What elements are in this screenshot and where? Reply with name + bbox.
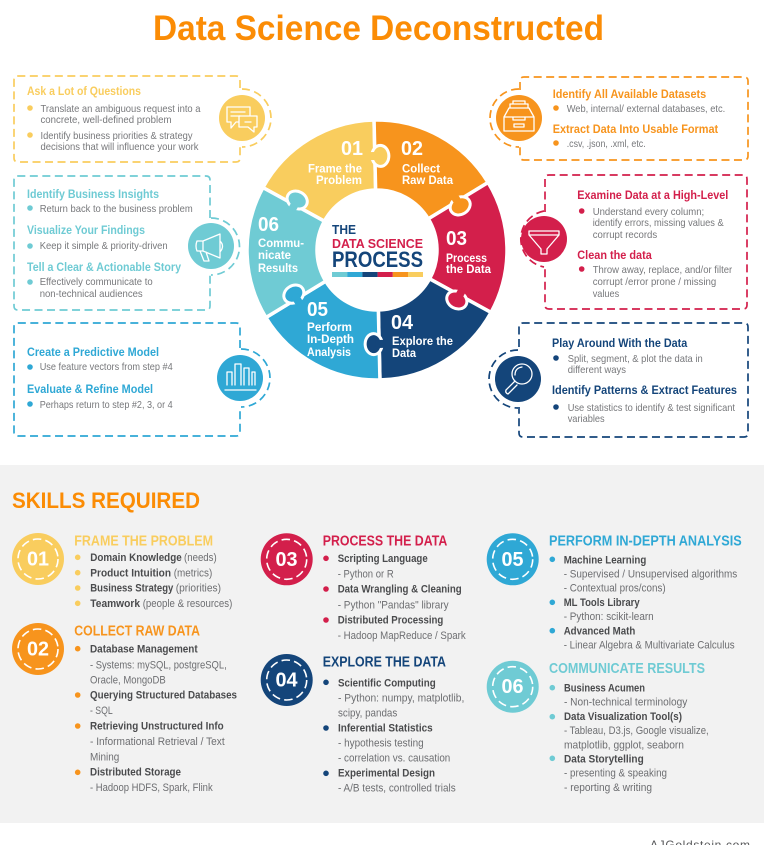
panel: process data details — [521, 175, 747, 309]
title: Data Science Deconstructed — [153, 9, 604, 48]
heading: evaluate: Evaluate & Refine Model — [27, 384, 153, 396]
segment label 05: Analysis — [307, 345, 351, 359]
text: examine — [579, 207, 724, 241]
skill: collect raw data: 02 — [27, 638, 49, 660]
skill: perform in-depth analysis: Machine Learning — [564, 554, 646, 566]
skill: frame the problem: Business Strategy — [90, 583, 173, 595]
skill: perform in-depth analysis: ML Tools Library — [564, 597, 640, 609]
skill: process the data: Scripting Language — [338, 553, 428, 565]
text: story: Effectively communicate to — [40, 277, 153, 288]
text: clean — [579, 265, 733, 300]
skill: frame the problem: (needs) — [184, 552, 217, 564]
segment label 03: the Data — [446, 262, 491, 276]
heading: ask questions: Ask a Lot of Questions — [27, 86, 141, 98]
center logo: PROCESS — [332, 247, 423, 272]
text: insights: Return back to the business problem — [40, 204, 193, 215]
skill: explore the data — [261, 654, 464, 795]
skill: collect raw data: Retrieving Unstructured Info — [90, 720, 224, 732]
text: predictive model: Use feature vectors from step #4 — [40, 362, 173, 373]
panel: explore data details — [489, 323, 748, 437]
skill: communicate results: - presenting & speaking — [564, 768, 667, 780]
skill: collect raw data: Database Management — [90, 643, 198, 655]
skill: frame the problem: (people & resources) — [143, 598, 232, 610]
heading: play: Play Around With the Data — [552, 338, 688, 350]
heading: skills required: SKILLS REQUIRED — [12, 488, 200, 513]
heading: predictive model: Create a Predictive Model — [27, 347, 159, 359]
text: examine: corrupt records — [593, 230, 657, 241]
skill: frame the problem: (metrics) — [174, 567, 212, 579]
text: play: Split, segment, & plot the data in — [568, 354, 703, 365]
skill: perform in-depth analysis: Advanced Math — [564, 625, 635, 637]
skill: communicate results: Business Acumen — [564, 682, 645, 694]
skill: perform in-depth analysis: 05 — [502, 549, 524, 571]
bullet list: ask questions: Translate an ambiguous request into a — [40, 104, 201, 115]
skill: frame the problem: Product Intuition — [90, 567, 171, 579]
text: extract: .csv, .json, .xml, etc. — [567, 139, 646, 150]
segment label 02: Raw Data — [402, 173, 453, 187]
skill: perform in-depth analysis — [487, 533, 742, 651]
skill: frame the problem: Domain Knowledge — [90, 552, 182, 564]
skill: collect raw data: - Hadoop HDFS, Spark, Flink — [90, 782, 213, 794]
heading: datasets: Identify All Available Datasets — [553, 89, 706, 101]
center logo: DATA SCIENCE — [332, 236, 423, 251]
bullet list: ask questions — [27, 104, 201, 153]
segment label 03: 03 — [446, 228, 467, 250]
segment label 04: Data — [392, 346, 416, 360]
skill: communicate results: - Non-technical terminology — [564, 697, 688, 709]
panel: skills required — [0, 465, 764, 823]
heading: examine: Examine Data at a High-Level — [577, 190, 728, 202]
skill: collect raw data: Oracle, MongoDB — [90, 674, 166, 686]
segment label 04 — [391, 312, 453, 360]
heading: insights: Identify Business Insights — [27, 189, 159, 201]
text: patterns — [553, 403, 735, 425]
icon: bar chart — [217, 355, 263, 401]
center logo — [332, 223, 423, 277]
segment label 06 — [258, 214, 304, 275]
bullet list: ask questions: Identify business priorities & strategy — [40, 131, 193, 142]
heading: visualize: Visualize Your Findings — [27, 225, 145, 237]
skill: communicate results: Data Visualization Tool(s) — [564, 711, 682, 723]
skill: frame the problem — [12, 533, 232, 610]
skill: collect raw data: Mining — [90, 752, 119, 764]
segment label 05: In-Depth — [307, 332, 354, 346]
skill: collect raw data — [12, 623, 237, 794]
skill: collect raw data: Querying Structured Databases — [90, 690, 237, 702]
skill: process the data: - Hadoop MapReduce / Spark — [338, 630, 466, 642]
skill: process the data: - Python or R — [338, 568, 394, 580]
text: evaluate: Perhaps return to step #2, 3, or 4 — [40, 400, 173, 411]
skill: communicate results: matplotlib, ggplot, seaborn — [564, 739, 684, 751]
heading: extract: Extract Data Into Usable Format — [553, 124, 718, 136]
text: patterns: Use statistics to identify & test significant — [568, 403, 735, 414]
panel: frame the problem details — [14, 76, 271, 162]
text: play: different ways — [568, 365, 626, 376]
skill: explore the data: - hypothesis testing — [338, 738, 424, 750]
skill: perform in-depth analysis: - Linear Algebra & Multivariate Calculus — [564, 639, 735, 651]
skill: explore the data: - correlation vs. causation — [338, 753, 450, 765]
skill: collect raw data: - SQL — [90, 705, 113, 717]
text: clean: values — [593, 289, 619, 300]
panel: communicate results details — [14, 176, 240, 310]
skill: explore the data: - Python: numpy, matplotlib, — [338, 693, 464, 705]
segment label 06: nicate — [258, 248, 291, 262]
skill: explore the data: scipy, pandas — [338, 708, 397, 720]
text: visualize: Keep it simple & priority-driven — [40, 241, 168, 252]
skill: perform in-depth analysis: - Python: scikit-learn — [564, 611, 654, 623]
skill: communicate results — [487, 661, 709, 794]
skill: process the data — [261, 533, 466, 642]
icon: megaphone — [188, 223, 234, 269]
skill: frame the problem: Teamwork — [90, 598, 140, 610]
segment label 01: Frame the — [308, 162, 362, 176]
bullet list: ask questions: decisions that will influence your work — [40, 142, 199, 153]
segment label 06: Commu- — [258, 236, 304, 250]
segment label 05: 05 — [307, 299, 328, 321]
skill: process the data: PROCESS THE DATA — [323, 534, 448, 550]
heading: clean: Clean the data — [577, 250, 652, 262]
segment label 06: Results — [258, 261, 298, 275]
icon: speech bubbles — [219, 95, 265, 141]
skill: perform in-depth analysis: PERFORM IN-DEPTH ANALYSIS — [549, 534, 742, 550]
skill: communicate results: COMMUNICATE RESULTS — [549, 661, 705, 677]
segment label 04: 04 — [391, 312, 414, 334]
segment label 01 — [308, 138, 363, 187]
skill: perform in-depth analysis: - Contextual pros/cons) — [564, 583, 666, 595]
segment label 05 — [307, 299, 354, 359]
segment label 04: Explore the — [392, 334, 453, 348]
skill: frame the problem: FRAME THE PROBLEM — [74, 534, 213, 550]
text: clean: corrupt /error prone / missing — [593, 277, 716, 288]
skill: explore the data: 04 — [276, 670, 298, 692]
text: examine: Understand every column; — [593, 207, 704, 218]
segment label 01: Problem — [316, 173, 362, 187]
process wheel — [207, 89, 547, 411]
skill: communicate results: 06 — [502, 676, 524, 698]
skill: process the data: Data Wrangling & Cleaning — [338, 584, 462, 596]
panel: collect raw data details — [490, 77, 748, 160]
skill: collect raw data: - Systems: mySQL, postgreSQL, — [90, 659, 227, 671]
skill: perform in-depth analysis: - Supervised / Unsupervised algorithms — [564, 569, 737, 581]
icon: file tray — [496, 95, 542, 141]
text: play — [553, 354, 703, 376]
text: examine: identify errors, missing values & — [593, 218, 724, 229]
skill: collect raw data: - Informational Retrieval / Text — [90, 736, 225, 748]
skill: explore the data: - A/B tests, controlled trials — [338, 783, 456, 795]
center logo: THE — [332, 223, 356, 237]
skill: communicate results: - Tableau, D3.js, Google visualize, — [564, 725, 709, 737]
segment label 03 — [446, 228, 491, 276]
icon: magnifying glass — [495, 356, 541, 402]
heading: patterns: Identify Patterns & Extract Features — [552, 385, 737, 397]
panel: perform analysis details — [14, 323, 270, 436]
segment label 05: Perform — [307, 320, 352, 334]
heading: story: Tell a Clear & Actionable Story — [27, 262, 182, 274]
skill: explore the data: Scientific Computing — [338, 677, 436, 689]
skill: collect raw data: Distributed Storage — [90, 767, 181, 779]
skill: process the data: - Python "Pandas" library — [338, 599, 449, 611]
skill: explore the data: Experimental Design — [338, 768, 435, 780]
text: datasets: Web, internal/ external databases, etc. — [567, 104, 725, 115]
skill: process the data: 03 — [276, 549, 298, 571]
segment label 03: Process — [446, 251, 487, 265]
segment label 06: 06 — [258, 214, 279, 236]
segment label 02: 02 — [401, 138, 423, 160]
skill: frame the problem: (priorities) — [176, 583, 221, 595]
text: story — [27, 277, 153, 300]
skill: process the data: Distributed Processing — [338, 614, 443, 626]
skill: explore the data: EXPLORE THE DATA — [323, 655, 446, 671]
icon: funnel — [521, 216, 567, 262]
segment label 01: 01 — [341, 138, 363, 160]
bullet list: ask questions: concrete, well-defined problem — [40, 115, 172, 126]
text: clean: Throw away, replace, and/or filter — [593, 265, 733, 276]
text: story: non-technical audiences — [40, 289, 143, 300]
skill: communicate results: Data Storytelling — [564, 753, 644, 765]
segment label 02 — [401, 138, 453, 187]
segment label 02: Collect — [402, 162, 440, 176]
text: patterns: variables — [568, 414, 605, 425]
skill: frame the problem: 01 — [27, 548, 49, 570]
skill: collect raw data: COLLECT RAW DATA — [74, 624, 200, 640]
skill: communicate results: - reporting & writing — [564, 782, 652, 794]
skill: explore the data: Inferential Statistics — [338, 723, 433, 735]
